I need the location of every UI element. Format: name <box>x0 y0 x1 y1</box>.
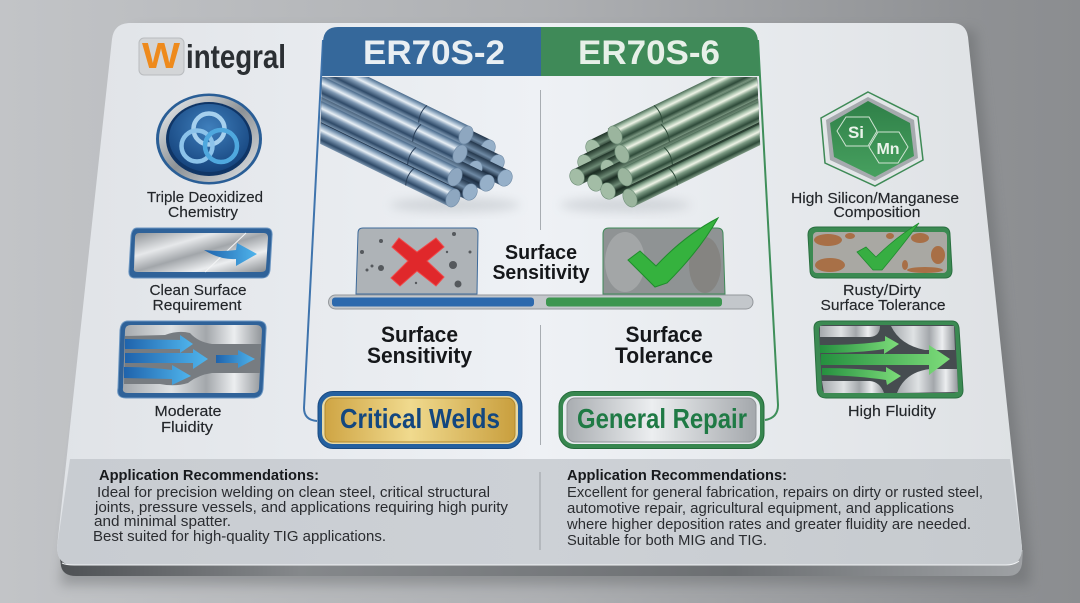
label: surface sensitivity: Surface <box>381 322 458 347</box>
logo: Wintegral: integral <box>186 38 286 75</box>
label: high silicon manganese composition: High Silicon/Manganese <box>791 190 959 207</box>
label: triple deoxidized chemistry: Triple Deoxidized <box>147 189 263 206</box>
logo tile <box>139 38 184 75</box>
badge: general repair: General Repair <box>577 403 747 434</box>
label: clean surface requirement <box>150 282 246 314</box>
text block: ER70S-2 application recommendations: Best suited for high-quality TIG applications. <box>93 528 386 545</box>
sensitivity bar gauge <box>328 295 753 309</box>
text block: ER70S-2 application recommendations: joints, pressure vessels, and applications requiring high purity <box>94 499 508 516</box>
text block: ER70S-6 application recommendations: where higher deposition rates and greater fluidity are needed. <box>566 516 971 533</box>
logo: Wintegral <box>139 35 286 76</box>
text block: ER70S-6 application recommendations: automotive repair, agricultural equipment, and applications <box>567 500 954 517</box>
badge: critical welds: Critical Welds <box>340 403 500 434</box>
panel: comparison frame outlines <box>304 40 778 421</box>
tile: tolerant surface with green check <box>603 218 725 294</box>
text block: ER70S-6 application recommendations <box>566 467 983 549</box>
label: surface tolerance <box>615 322 713 368</box>
label: triple deoxidized chemistry <box>147 189 263 221</box>
center divider upper <box>540 90 542 230</box>
label: high silicon manganese composition: Composition <box>834 204 920 221</box>
icon: moderate fluidity <box>118 321 266 398</box>
text block: ER70S-6 application recommendations: Suitable for both MIG and TIG. <box>567 532 767 549</box>
label: rusty dirty surface tolerance <box>820 282 946 314</box>
label: rusty dirty surface tolerance: Rusty/Dirty <box>843 282 922 299</box>
text block: ER70S-2 application recommendations <box>93 467 508 545</box>
label: centre surface sensitivity: Surface <box>505 242 577 264</box>
icon: red cross <box>391 238 444 286</box>
illustration: green welding rods bundle <box>564 77 760 214</box>
badge: general repair <box>559 392 764 448</box>
icon: green check <box>628 218 718 287</box>
label: moderate fluidity: Fluidity <box>161 419 214 436</box>
text block: ER70S-2 application recommendations: Application Recommendations: <box>99 467 319 484</box>
icon: Si Mn hexagon <box>821 92 923 186</box>
icon: clean surface <box>129 228 272 278</box>
icon: Si Mn hexagon: Si <box>848 123 864 142</box>
text block: ER70S-2 application recommendations: and minimal spatter. <box>94 513 231 530</box>
label: clean surface requirement: Clean Surface <box>150 282 246 299</box>
text block: ER70S-6 application recommendations: Application Recommendations: <box>567 467 787 484</box>
icon: high fluidity <box>814 321 963 398</box>
label: high silicon manganese composition <box>791 190 959 221</box>
label: moderate fluidity: Moderate <box>154 403 222 420</box>
header: ER70S-2 <box>322 27 541 76</box>
label: centre surface sensitivity <box>492 242 590 284</box>
label: surface tolerance: Surface <box>626 322 702 347</box>
divider bottom <box>539 472 541 550</box>
label: surface sensitivity <box>367 322 473 368</box>
center divider lower <box>540 325 542 445</box>
header: ER70S-2: ER70S-2 <box>363 34 505 72</box>
badge: critical welds <box>318 392 522 448</box>
label: surface tolerance: Tolerance <box>615 343 713 368</box>
icon: triple deoxidized rings <box>156 94 262 184</box>
tile: pitted surface with red cross <box>356 228 478 294</box>
label: surface sensitivity: Sensitivity <box>367 343 473 368</box>
label: centre surface sensitivity: Sensitivity <box>492 262 590 284</box>
label: moderate fluidity <box>154 403 222 436</box>
label: triple deoxidized chemistry: Chemistry <box>168 204 239 221</box>
label: clean surface requirement: Requirement <box>152 297 242 314</box>
header: ER70S-6 <box>541 27 760 76</box>
text block: ER70S-2 application recommendations: Ideal for precision welding on clean steel, critical structural <box>97 484 490 501</box>
icon: Si Mn hexagon: Mn <box>876 141 900 158</box>
logo wordmark: W <box>142 35 180 76</box>
header: ER70S-6: ER70S-6 <box>578 34 720 72</box>
label: rusty dirty surface tolerance: Surface Tolerance <box>820 297 946 314</box>
icon: rusty surface with check <box>808 223 952 278</box>
green bar <box>546 298 722 306</box>
text block: ER70S-6 application recommendations: Excellent for general fabrication, repairs on dirty or rusted steel, <box>567 484 983 501</box>
blue bar <box>332 298 534 306</box>
illustration: blue welding rods bundle <box>320 77 516 214</box>
label: high fluidity: High Fluidity <box>848 403 937 420</box>
